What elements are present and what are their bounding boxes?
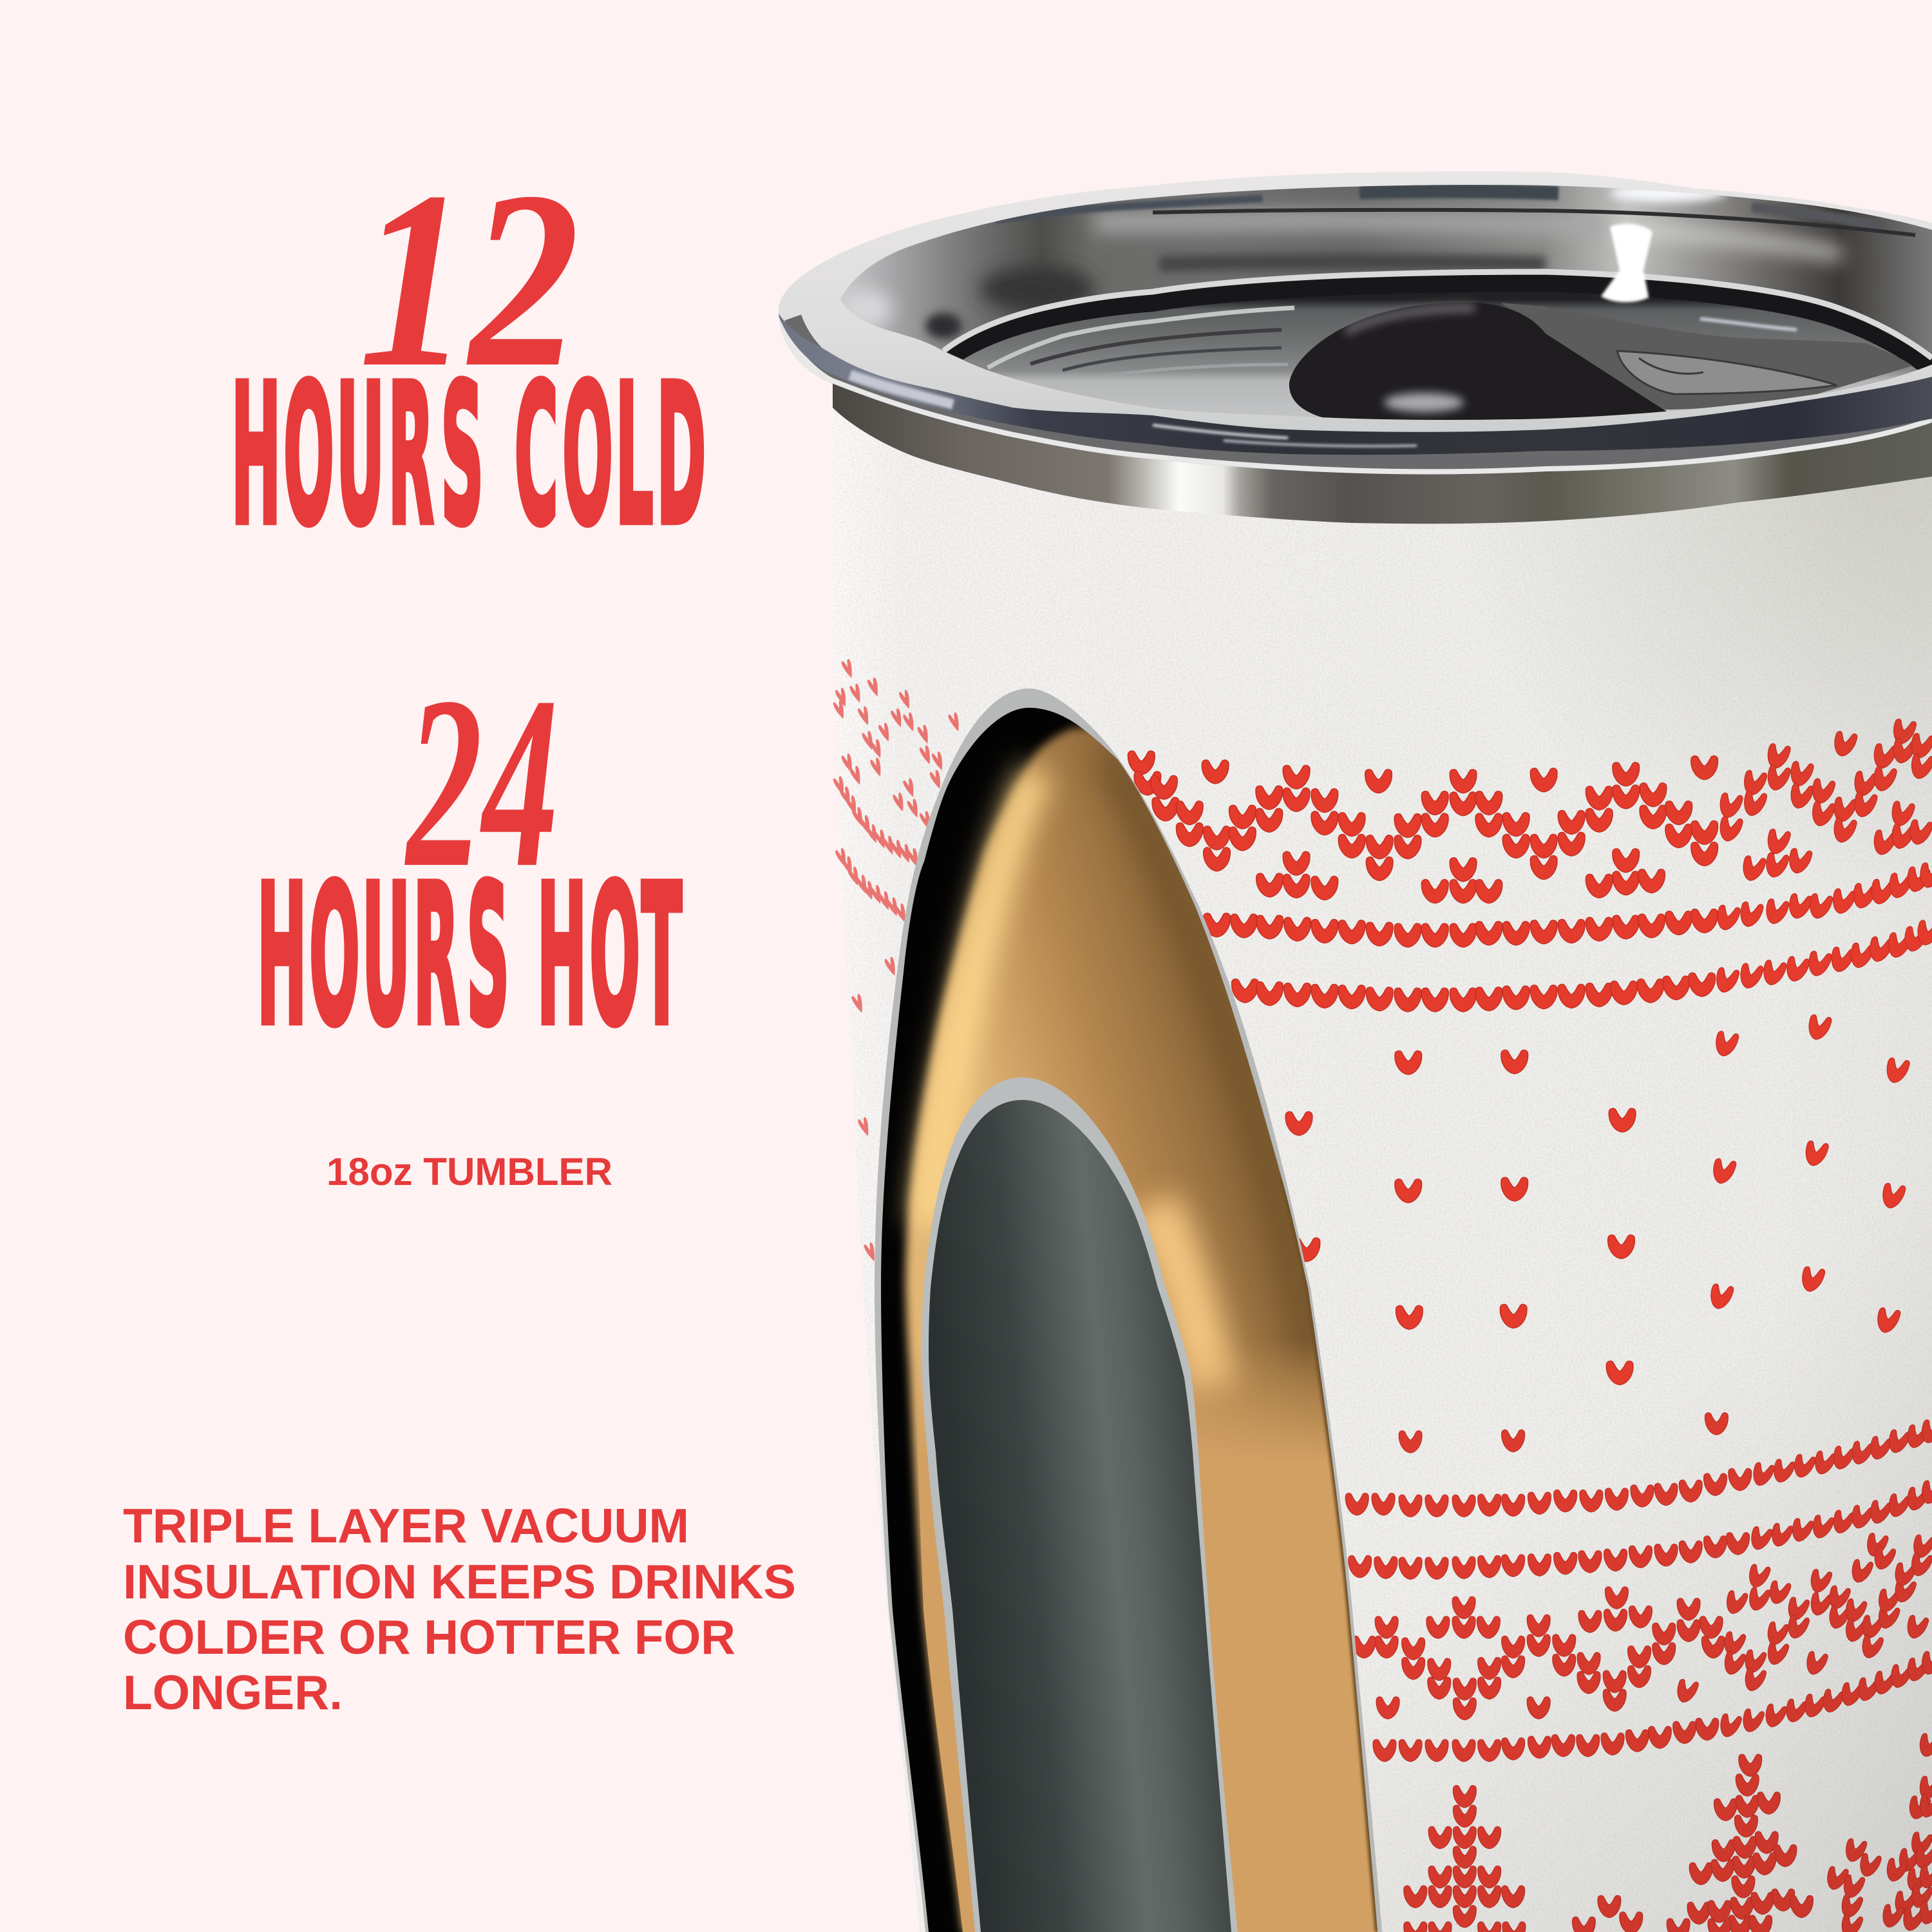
slider reflection (1700, 319, 1797, 330)
inner wall outline (922, 1077, 1238, 1932)
lid front rim (776, 309, 1932, 474)
lid inner well (940, 270, 1932, 425)
body shading and powder-coat texture (831, 386, 1932, 1932)
knit pattern: left sliver (833, 659, 963, 1263)
button highlight (1384, 393, 1464, 412)
heading: 24 hours hot (257, 646, 682, 1068)
body text: insulation description: TRIPLE LAYER VACUUM (123, 1499, 689, 1553)
recess metal reflections (1095, 220, 1610, 227)
lid (776, 171, 1932, 474)
lid slider (1501, 303, 1913, 410)
product label: 18oz tumbler: 18oz TUMBLER (327, 1150, 612, 1193)
heading: 12 hours cold: HOURS COLD (231, 344, 706, 568)
tumbler illustration (776, 171, 1932, 1932)
button top sheen (1346, 308, 1475, 332)
body text: insulation description (123, 1499, 796, 1719)
heading: 12 hours cold (231, 140, 706, 568)
tumbler body (833, 380, 1932, 1932)
slider thumb mark (1639, 358, 1703, 374)
cutout: outer wall (875, 688, 1382, 1932)
steel band under lid (833, 380, 1932, 524)
body text: insulation description: COLDER OR HOTTER FOR (123, 1610, 735, 1664)
lid black button (1289, 303, 1668, 422)
cutout: vacuum gap and copper layer (876, 702, 1417, 1932)
lid glare (1601, 223, 1653, 302)
copper bright highlight (927, 773, 1037, 1224)
heading: 24 hours hot: HOURS HOT (257, 844, 682, 1068)
inner wall dark steel (929, 1100, 1231, 1932)
lid clear outer shell (779, 171, 1932, 474)
heading: 24 hours hot: 24 (404, 646, 558, 918)
body text: insulation description: LONGER. (123, 1665, 343, 1719)
knit pattern: lower chain rows, fair isle band and trees (1345, 1413, 1932, 1932)
copper dark side (1108, 753, 1314, 1365)
copper lower highlight (1153, 1204, 1211, 1391)
ring around inner well (943, 272, 1932, 358)
body text: insulation description: INSULATION KEEPS DRINKS (123, 1555, 796, 1609)
knit pattern: upper fair isle band, chain rows and dots (1128, 719, 1932, 1385)
copper layer (905, 708, 1417, 1932)
slider raised panel (1617, 351, 1837, 394)
cut edge shadow (1282, 1178, 1378, 1932)
copper flat lower area (914, 1340, 1417, 1932)
lid recess (831, 180, 1932, 431)
heading: 12 hours cold: 12 (359, 140, 580, 420)
